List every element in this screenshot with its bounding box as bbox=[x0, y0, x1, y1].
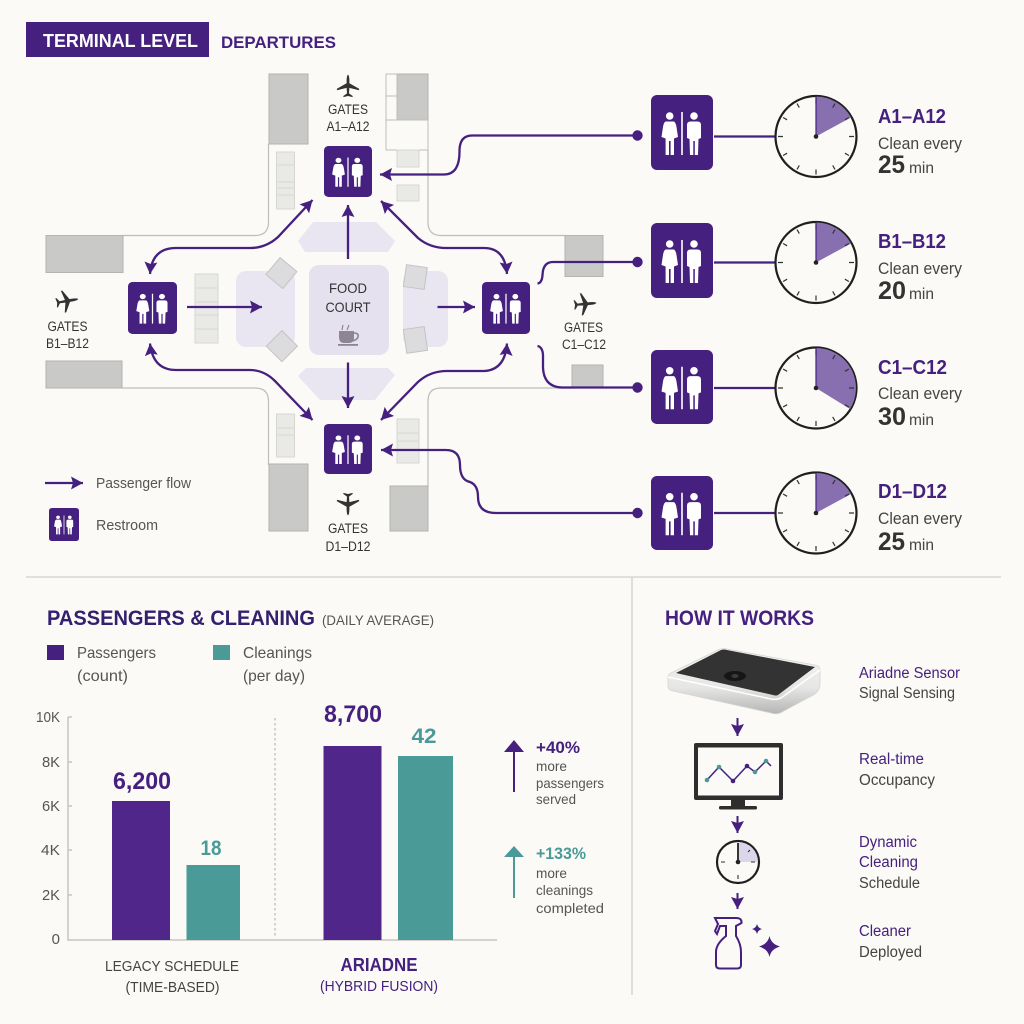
chart legend: (per day) bbox=[243, 668, 305, 685]
schedule row: D1-D12: Clean every bbox=[878, 510, 963, 528]
chart legend bbox=[47, 645, 312, 685]
icon: spray bottle and sparkles bbox=[715, 918, 780, 968]
gate label: C1-C12: GATES bbox=[564, 320, 603, 335]
gate label: A1-A12: GATES bbox=[328, 102, 368, 117]
step text: cleaner deployed: Deployed bbox=[859, 944, 922, 961]
heading: passengers and cleaning: (DAILY AVERAGE) bbox=[322, 612, 434, 628]
food court bbox=[236, 222, 448, 400]
callout: +133% cleanings: cleanings bbox=[536, 882, 593, 898]
callout: +40% passengers: passengers bbox=[536, 775, 604, 791]
bar chart: ARIADNE bbox=[340, 955, 418, 975]
schedule row: C1-C12: 30 bbox=[878, 403, 906, 431]
restroom icon: left bbox=[128, 282, 177, 334]
schedule row: C1-C12: Clean every bbox=[878, 385, 963, 403]
bar: ariadne cleanings bbox=[398, 756, 453, 940]
bar: legacy cleanings bbox=[186, 865, 240, 940]
schedule row: A1-A12 bbox=[651, 95, 963, 179]
map legend: Passenger flow bbox=[96, 476, 192, 492]
step text: real-time occupancy: Real-time bbox=[859, 751, 924, 768]
schedule row: D1-D12 bbox=[651, 472, 963, 556]
gate label: B1-B12: GATES bbox=[48, 319, 88, 334]
bar chart: 8,700 bbox=[324, 701, 382, 728]
restroom icon: top bbox=[324, 146, 372, 197]
passenger flow arrows bbox=[150, 200, 507, 420]
schedule row: D1-D12: D1–D12 bbox=[878, 481, 947, 503]
header: terminal level: DEPARTURES bbox=[221, 33, 336, 52]
gate label: D1-D12: GATES bbox=[328, 521, 368, 536]
arrow: schedule to cleaner bbox=[736, 893, 738, 909]
bar chart: 18 bbox=[200, 837, 222, 860]
gate label: B1-B12: B1–B12 bbox=[46, 336, 89, 351]
step text: real-time occupancy bbox=[859, 751, 935, 789]
callout: +133% cleanings: +133% bbox=[536, 844, 586, 863]
map legend bbox=[45, 476, 192, 541]
schedule row: D1-D12: min bbox=[909, 537, 934, 554]
gate label: A1-A12 bbox=[326, 74, 370, 134]
clock: 25 min bbox=[776, 472, 856, 554]
arrow: occupancy to schedule bbox=[736, 816, 738, 833]
restroom icon: right bbox=[482, 282, 530, 334]
bar chart: 0 bbox=[52, 931, 60, 948]
step text: dynamic cleaning schedule bbox=[859, 834, 920, 892]
gate label: B1-B12 bbox=[46, 288, 89, 351]
schedule row: A1-A12: A1–A12 bbox=[878, 106, 946, 128]
callout: +133% cleanings bbox=[504, 844, 604, 916]
chart legend: Passengers bbox=[77, 645, 156, 662]
floor plan: corridors and gate blocks bbox=[46, 74, 603, 531]
icon: coffee cup bbox=[338, 325, 358, 346]
bar: ariadne passengers bbox=[324, 746, 382, 940]
step text: ariadne sensor: Ariadne Sensor bbox=[859, 665, 960, 682]
step text: dynamic cleaning schedule: Dynamic bbox=[859, 834, 917, 851]
gate label: A1-A12: A1–A12 bbox=[326, 119, 370, 134]
schedule row: B1-B12: min bbox=[909, 286, 934, 303]
bar chart: 4K bbox=[41, 842, 60, 859]
food court: COURT bbox=[326, 299, 371, 315]
bar chart: (HYBRID FUSION) bbox=[320, 978, 438, 995]
connector lines to schedule bbox=[380, 130, 776, 518]
bar: legacy passengers bbox=[112, 801, 170, 940]
bar chart: 42 bbox=[412, 725, 436, 748]
clock: 25 min bbox=[776, 96, 856, 177]
gate label: D1-D12: D1–D12 bbox=[326, 539, 370, 554]
callout: +133% cleanings: more bbox=[536, 865, 567, 881]
schedule row: C1-C12: min bbox=[909, 412, 934, 429]
icon: schedule clock bbox=[717, 841, 759, 883]
schedule row: A1-A12: min bbox=[909, 160, 934, 177]
bar chart: (TIME-BASED) bbox=[126, 979, 220, 996]
gate label: C1-C12: C1–C12 bbox=[562, 337, 606, 352]
step text: real-time occupancy: Occupancy bbox=[859, 772, 935, 789]
schedule row: C1-C12 bbox=[651, 348, 963, 431]
icon: ariadne sensor bbox=[668, 649, 820, 714]
bar chart: LEGACY SCHEDULE bbox=[105, 958, 239, 975]
callout: +40% passengers bbox=[504, 738, 604, 807]
arrow: sensor to occupancy bbox=[736, 718, 738, 736]
bar chart: 10K bbox=[36, 709, 60, 726]
schedule row: B1-B12: Clean every bbox=[878, 260, 963, 278]
step text: ariadne sensor: Signal Sensing bbox=[859, 685, 955, 702]
bar chart bbox=[36, 701, 497, 996]
header: terminal level: TERMINAL LEVEL bbox=[43, 31, 198, 51]
gate label: C1-C12 bbox=[562, 292, 606, 352]
chart legend: (count) bbox=[77, 668, 128, 685]
schedule row: C1-C12: C1–C12 bbox=[878, 357, 947, 379]
step text: dynamic cleaning schedule: Cleaning bbox=[859, 854, 918, 871]
bar chart: 8K bbox=[42, 754, 60, 771]
bar chart: 6,200 bbox=[113, 768, 171, 795]
heading: passengers and cleaning: PASSENGERS & CLEANING bbox=[47, 607, 315, 630]
step text: cleaner deployed: Cleaner bbox=[859, 923, 911, 940]
callout: +40% passengers: served bbox=[536, 791, 576, 807]
restroom icon: bottom bbox=[324, 424, 372, 474]
bar chart: 2K bbox=[42, 887, 60, 904]
callout: +133% cleanings: completed bbox=[536, 900, 604, 916]
callout: +40% passengers: more bbox=[536, 758, 567, 774]
bar chart: 6K bbox=[42, 798, 60, 815]
schedule row: D1-D12: 25 bbox=[878, 528, 905, 556]
schedule row: B1-B12 bbox=[651, 222, 963, 305]
map legend: Restroom bbox=[96, 518, 158, 534]
gate label: D1-D12 bbox=[326, 493, 370, 554]
clock: 30 min bbox=[776, 348, 856, 428]
step text: dynamic cleaning schedule: Schedule bbox=[859, 875, 920, 892]
chart legend: Cleanings bbox=[243, 645, 312, 662]
step text: cleaner deployed bbox=[859, 923, 922, 961]
icon: monitor bbox=[694, 743, 783, 810]
clock: 20 min bbox=[776, 222, 856, 303]
food court: FOOD bbox=[329, 280, 367, 296]
schedule row: A1-A12: 25 bbox=[878, 151, 905, 179]
heading: how it works: HOW IT WORKS bbox=[665, 607, 814, 630]
schedule row: B1-B12: B1–B12 bbox=[878, 231, 946, 253]
schedule row: A1-A12: Clean every bbox=[878, 135, 963, 153]
header: terminal level bbox=[26, 22, 336, 57]
callout: +40% passengers: +40% bbox=[536, 738, 580, 757]
step text: ariadne sensor bbox=[859, 665, 960, 702]
schedule row: B1-B12: 20 bbox=[878, 277, 906, 305]
